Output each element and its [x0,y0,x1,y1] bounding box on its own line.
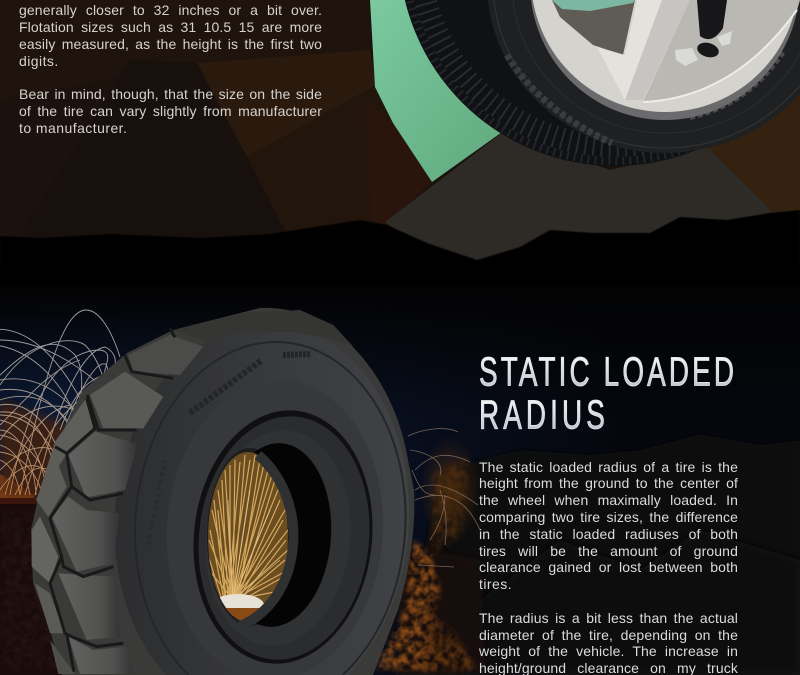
rim opening [181,401,385,673]
tread blocks [32,310,353,674]
text block: flotation sizes note [19,2,322,136]
text block: static loaded radius explanation: weight of the vehicle. The increase in [479,643,738,659]
photo: green block [370,0,505,182]
light-painting spark arcs, right [408,429,480,567]
ground and horizon, left side [0,400,120,675]
text block: static loaded radius explanation: in the static loaded radiuses of both [479,526,738,542]
grey polygon behind tire [385,132,773,265]
photo: upper car tire and alloy wheel [399,0,800,166]
text block: static loaded radius explanation: height from the ground to the center of [479,475,738,491]
text block: flotation sizes note: digits. [19,53,59,69]
text block: flotation sizes note: easily measured, as the height is the first two [19,36,322,52]
background: brown low-poly upper section [0,0,800,265]
text block: flotation sizes note: of the tire can vary slightly from manufacturer [19,103,322,119]
text block: static loaded radius explanation: the wheel when maximally loaded. In [479,492,738,508]
text block: static loaded radius explanation: The static loaded radius of a tire is the [479,459,738,475]
text block: static loaded radius explanation [479,459,738,675]
text block: flotation sizes note: Flotation sizes such as 31 10.5 15 are more [19,19,322,35]
sidewall [487,0,800,153]
mountain and ground, right side [375,434,800,675]
spoke [597,0,662,100]
rim [530,0,800,120]
text block: static loaded radius explanation: tires. [479,576,512,592]
lug nuts and valve [675,48,698,66]
tire body [31,308,414,675]
text block: static loaded radius explanation: tires will be the amount of ground [479,543,738,559]
text block: static loaded radius explanation: diameter of the tire, depending on the [479,627,738,643]
night sky lower section [0,250,800,675]
inner barrel edge [240,455,293,626]
text block: static loaded radius explanation: clearance gained or lost between both [479,559,738,575]
text block: static loaded radius explanation: The radius is a bit less than the actual [479,610,738,626]
tread [399,0,800,166]
dark treeline silhouette [0,210,800,285]
wheel opening [552,0,635,55]
text block: static loaded radius explanation: comparing two tire sizes, the difference [479,509,738,525]
heading: static loaded radius: STATIC LOADED [479,349,734,395]
heading: static loaded radius [479,349,734,438]
photo: industrial tire with tread blocks [31,308,414,675]
spark burst seen through the tire [208,452,288,620]
sidewall lettering band [148,354,311,545]
sidewall [114,324,409,675]
text block: flotation sizes note: to manufacturer. [19,120,127,136]
text block: flotation sizes note: generally closer to 32 inches or a bit over. [19,2,322,18]
heading: static loaded radius: RADIUS [479,392,605,438]
light-painting spark arcs, left [0,310,120,495]
text block: flotation sizes note: Bear in mind, though, that the size on the side [19,86,322,102]
